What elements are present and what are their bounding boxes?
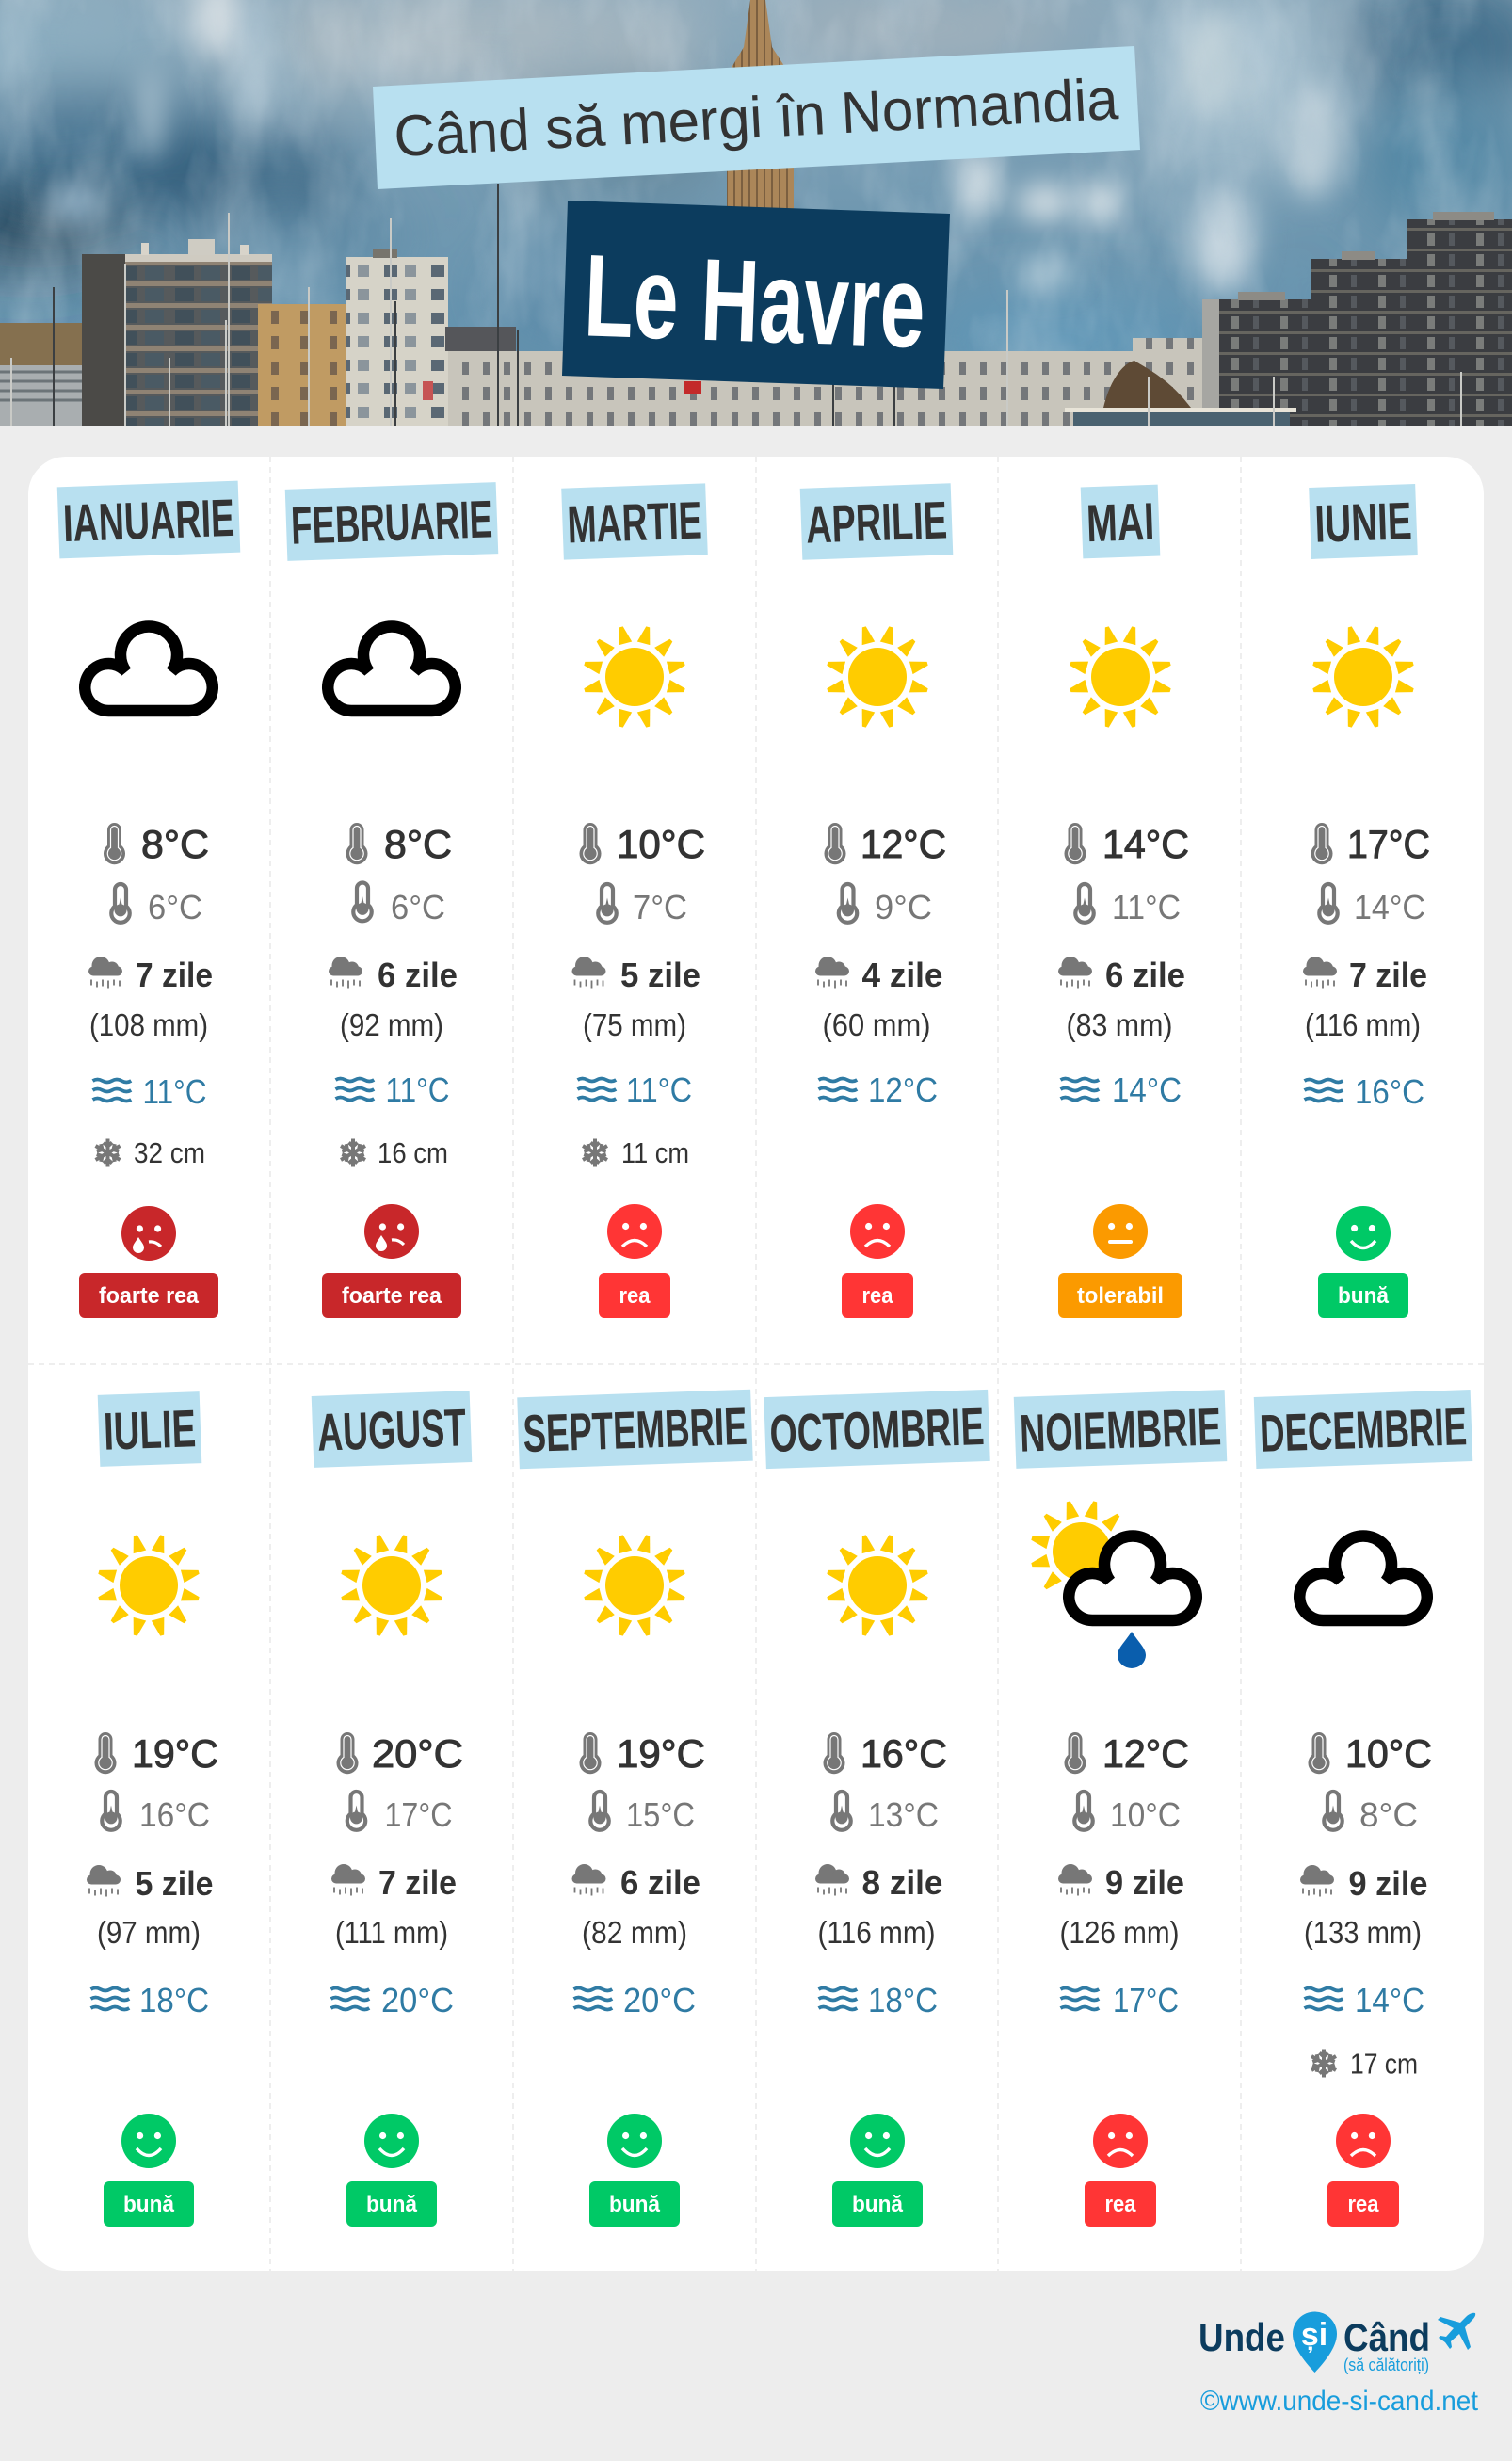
- sea temperature: 18°C: [868, 1981, 938, 2019]
- month: Februarie: [285, 482, 498, 1318]
- sea temperature: 14°C: [1355, 1981, 1424, 2019]
- snow: [93, 1136, 205, 1169]
- high temperature: 14°C: [1102, 822, 1189, 866]
- rating: foarte rea: foarte rea: [342, 1283, 442, 1309]
- rating: bună: [832, 2114, 923, 2227]
- rating: bună: bună: [366, 2192, 418, 2217]
- rating: foarte rea: foarte rea: [99, 1283, 200, 1309]
- month: Septembrie: [517, 1390, 753, 2227]
- low temperature: [1074, 1792, 1181, 1834]
- icon: airplane: [1438, 2313, 1475, 2350]
- high temperature: [346, 822, 452, 866]
- snow: 32 cm: [134, 1136, 205, 1169]
- low temperature: [102, 1792, 210, 1834]
- rating: foarte rea: [322, 1204, 461, 1318]
- rain days: 8 zile: [862, 1863, 943, 1902]
- high temperature: [825, 822, 946, 866]
- rain days: 6 zile: [620, 1863, 700, 1902]
- rating: tolerabil: tolerabil: [1077, 1283, 1164, 1309]
- high temperature: 17°C: [1347, 822, 1430, 866]
- rating: bună: bună: [123, 2192, 175, 2217]
- month title: IULIE: [103, 1398, 197, 1461]
- high temperature: 8°C: [141, 822, 209, 866]
- high temperature: 10°C: [1345, 1731, 1432, 1776]
- weather icon: sun: [826, 625, 929, 729]
- logo: Unde și Când: Unde: [1198, 2315, 1285, 2359]
- snow: [581, 1136, 689, 1169]
- high temperature: [823, 1731, 947, 1776]
- low temperature: 9°C: [875, 888, 932, 926]
- low temperature: [347, 1792, 452, 1834]
- high temperature: 19°C: [132, 1731, 218, 1776]
- month title: [800, 483, 953, 560]
- weather icon: sun: [826, 1534, 929, 1637]
- high temperature: [94, 1731, 218, 1776]
- snow: 17 cm: [1350, 2047, 1418, 2081]
- high temperature: [104, 822, 209, 866]
- month: Aprilie: [800, 483, 953, 1318]
- weather icon: sun: [340, 1534, 443, 1637]
- rainfall: (116 mm): [1305, 1007, 1421, 1042]
- rainfall: (108 mm): [89, 1007, 208, 1042]
- sea temperature: 16°C: [1355, 1072, 1424, 1111]
- high temperature: [337, 1731, 463, 1776]
- month title: [1014, 1390, 1227, 1469]
- month: Iunie: [1303, 484, 1430, 1318]
- weather icon: sun: [97, 1534, 201, 1637]
- rating: tolerabil: [1058, 1204, 1182, 1318]
- month title: IUNIE: [1313, 491, 1413, 554]
- sea temperature: [819, 1070, 938, 1109]
- photo: Le Havre skyline under cloudy sky: [0, 0, 1512, 426]
- weather icon: sun, cloud and rain drop: [1030, 1500, 1197, 1668]
- rainfall: (60 mm): [823, 1007, 930, 1042]
- rating: bună: bună: [609, 2192, 661, 2217]
- sea temperature: 11°C: [626, 1070, 692, 1109]
- low temperature: [832, 1792, 939, 1834]
- low temperature: [353, 883, 445, 926]
- rain days: [1058, 1863, 1184, 1902]
- rain days: 9 zile: [1348, 1864, 1427, 1903]
- rainfall: (111 mm): [335, 1915, 448, 1950]
- rain days: 6 zile: [1105, 956, 1185, 994]
- low temperature: [1324, 1792, 1418, 1834]
- rain days: [331, 1863, 457, 1902]
- rating: foarte rea: [79, 1206, 218, 1318]
- sea temperature: 11°C: [143, 1072, 207, 1111]
- rain days: [329, 956, 458, 994]
- rain days: [88, 956, 213, 994]
- sea temperature: 18°C: [139, 1981, 209, 2019]
- sea temperature: 17°C: [1113, 1981, 1179, 2019]
- rating: bună: [1318, 1206, 1408, 1318]
- rain days: [1303, 956, 1427, 994]
- high temperature: 12°C: [861, 822, 946, 866]
- rating: rea: [1327, 2114, 1399, 2227]
- sea temperature: [1060, 1070, 1182, 1109]
- high temperature: 19°C: [617, 1731, 705, 1776]
- sea temperature: [578, 1070, 692, 1109]
- logo: Unde și Când: Când: [1343, 2315, 1430, 2359]
- high temperature: 8°C: [384, 822, 452, 866]
- weather icon: cloud: [85, 627, 213, 711]
- rating: rea: rea: [862, 1283, 893, 1309]
- month title: NOIEMBRIE: [1019, 1396, 1222, 1463]
- low temperature: [590, 1792, 695, 1834]
- sea temperature: 12°C: [868, 1070, 938, 1109]
- sea temperature: [819, 1981, 938, 2019]
- rating: rea: rea: [619, 1283, 651, 1309]
- icon: location pin: [1293, 2312, 1337, 2373]
- rain days: [572, 1863, 700, 1902]
- month title: IANUARIE: [62, 488, 235, 553]
- high temperature: [1064, 822, 1189, 866]
- city label: Le Havre: [562, 201, 950, 389]
- month title: MARTIE: [566, 491, 703, 554]
- low temperature: 6°C: [391, 888, 445, 926]
- rain days: [815, 1863, 943, 1902]
- weather icon: cloud: [328, 627, 456, 711]
- low temperature: 14°C: [1354, 888, 1425, 926]
- month title: [312, 1391, 472, 1468]
- rain days: 9 zile: [1105, 1863, 1184, 1902]
- low temperature: 16°C: [139, 1795, 210, 1834]
- weather icon: sun: [1311, 625, 1415, 729]
- rainfall: (83 mm): [1066, 1007, 1173, 1042]
- low temperature: 17°C: [384, 1795, 452, 1834]
- title label: Când să mergi în Normandia: Când să mergi în Normandia: [393, 67, 1120, 169]
- sea temperature: 20°C: [623, 1981, 696, 2019]
- high temperature: [1311, 822, 1430, 866]
- rain days: 5 zile: [136, 1864, 213, 1903]
- month: Octombrie: [764, 1390, 990, 2227]
- snow: [1310, 2047, 1418, 2081]
- month title: AUGUST: [316, 1397, 467, 1462]
- month: Iulie: [87, 1391, 218, 2227]
- rain days: [1300, 1864, 1427, 1903]
- rain days: [815, 956, 943, 994]
- rainfall: (97 mm): [97, 1915, 201, 1950]
- rating: rea: rea: [1348, 2192, 1379, 2217]
- month title: [517, 1390, 753, 1469]
- rainfall: (133 mm): [1304, 1915, 1422, 1950]
- sea temperature: 14°C: [1112, 1070, 1182, 1109]
- rating: rea: rea: [1105, 2192, 1136, 2217]
- rating: rea: [1085, 2114, 1156, 2227]
- month title: [561, 483, 708, 560]
- sea temperature: [1305, 1981, 1424, 2019]
- low temperature: 11°C: [1112, 888, 1181, 926]
- rainfall: (126 mm): [1060, 1915, 1179, 1950]
- high temperature: 12°C: [1102, 1731, 1189, 1776]
- sea temperature: [1305, 1072, 1424, 1111]
- month title: SEPTEMBRIE: [522, 1396, 748, 1463]
- rating: rea: [842, 1204, 913, 1318]
- month: Decembrie: [1254, 1390, 1472, 2227]
- weather icon: sun: [1069, 625, 1172, 729]
- high temperature: 16°C: [861, 1731, 947, 1776]
- high temperature: 20°C: [372, 1731, 463, 1776]
- rainfall: (75 mm): [583, 1007, 686, 1042]
- rain days: [87, 1864, 213, 1903]
- low temperature: 13°C: [868, 1795, 939, 1834]
- sea temperature: [1060, 1981, 1179, 2019]
- website credit: ©www.unde-si-cand.net: [1200, 2386, 1479, 2417]
- month: Ianuarie: [57, 481, 240, 1318]
- rating: rea: [599, 1204, 670, 1318]
- month title: [285, 482, 498, 561]
- sea temperature: 11°C: [386, 1070, 450, 1109]
- month title: APRILIE: [805, 490, 948, 555]
- month: Martie: [561, 483, 708, 1318]
- rain days: [1058, 956, 1185, 994]
- logo: Unde și Când: [1198, 2312, 1475, 2374]
- weather icon: sun: [583, 1534, 686, 1637]
- month title: [1081, 485, 1160, 558]
- low temperature: [839, 884, 932, 926]
- low temperature: [111, 884, 202, 926]
- snow: 11 cm: [621, 1136, 689, 1169]
- month title: OCTOMBRIE: [768, 1396, 986, 1463]
- rating: bună: bună: [1338, 1283, 1390, 1309]
- rain days: 6 zile: [378, 956, 458, 994]
- low temperature: 7°C: [633, 888, 687, 926]
- header with photo and titles: [0, 0, 1512, 426]
- sea temperature: [335, 1070, 450, 1109]
- high temperature: [1309, 1731, 1432, 1776]
- rain days: 7 zile: [378, 1863, 457, 1902]
- low temperature: 10°C: [1110, 1795, 1181, 1834]
- month title: [57, 481, 240, 558]
- low temperature: 6°C: [148, 888, 202, 926]
- sea temperature: [574, 1981, 696, 2019]
- sea temperature: [331, 1981, 454, 2019]
- white calendar card: [28, 457, 1484, 2271]
- rain days: 5 zile: [620, 956, 700, 994]
- rainfall: (92 mm): [340, 1007, 443, 1042]
- icon: location pin: și: [1301, 2317, 1327, 2353]
- month title: FEBRUARIE: [290, 489, 493, 555]
- rain days: 7 zile: [136, 956, 213, 994]
- rainfall: (82 mm): [582, 1915, 687, 1950]
- month: Mai: [1058, 485, 1189, 1318]
- month title: [764, 1390, 990, 1469]
- high temperature: [1064, 1731, 1189, 1776]
- sea temperature: [90, 1981, 209, 2019]
- sea temperature: 20°C: [381, 1981, 454, 2019]
- rain days: [572, 956, 700, 994]
- rating: bună: [589, 2114, 680, 2227]
- city label: Le Havre: Le Havre: [582, 231, 927, 373]
- sea temperature: [92, 1072, 207, 1111]
- low temperature: [1319, 884, 1425, 926]
- rating: bună: [346, 2114, 437, 2227]
- month: August: [312, 1391, 472, 2227]
- low temperature: 15°C: [626, 1795, 695, 1834]
- weather icon: sun: [583, 625, 686, 729]
- low temperature: [1075, 884, 1181, 926]
- month title: [1309, 484, 1418, 559]
- month title: MAI: [1086, 491, 1155, 553]
- snow: 16 cm: [378, 1136, 448, 1169]
- month title: [98, 1391, 201, 1467]
- low temperature: 8°C: [1359, 1795, 1418, 1834]
- logo: Unde și Când: (să călătoriți): [1343, 2356, 1429, 2374]
- high temperature: 10°C: [617, 822, 705, 866]
- weather icon: cloud: [1299, 1536, 1427, 1620]
- rain days: 4 zile: [862, 956, 943, 994]
- rating: bună: bună: [852, 2192, 904, 2217]
- rating: bună: [104, 2114, 194, 2227]
- rain days: 7 zile: [1349, 956, 1427, 994]
- rainfall: (116 mm): [817, 1915, 936, 1950]
- snow: [339, 1136, 448, 1169]
- low temperature: [598, 884, 687, 926]
- month: Noiembrie: [1014, 1390, 1227, 2227]
